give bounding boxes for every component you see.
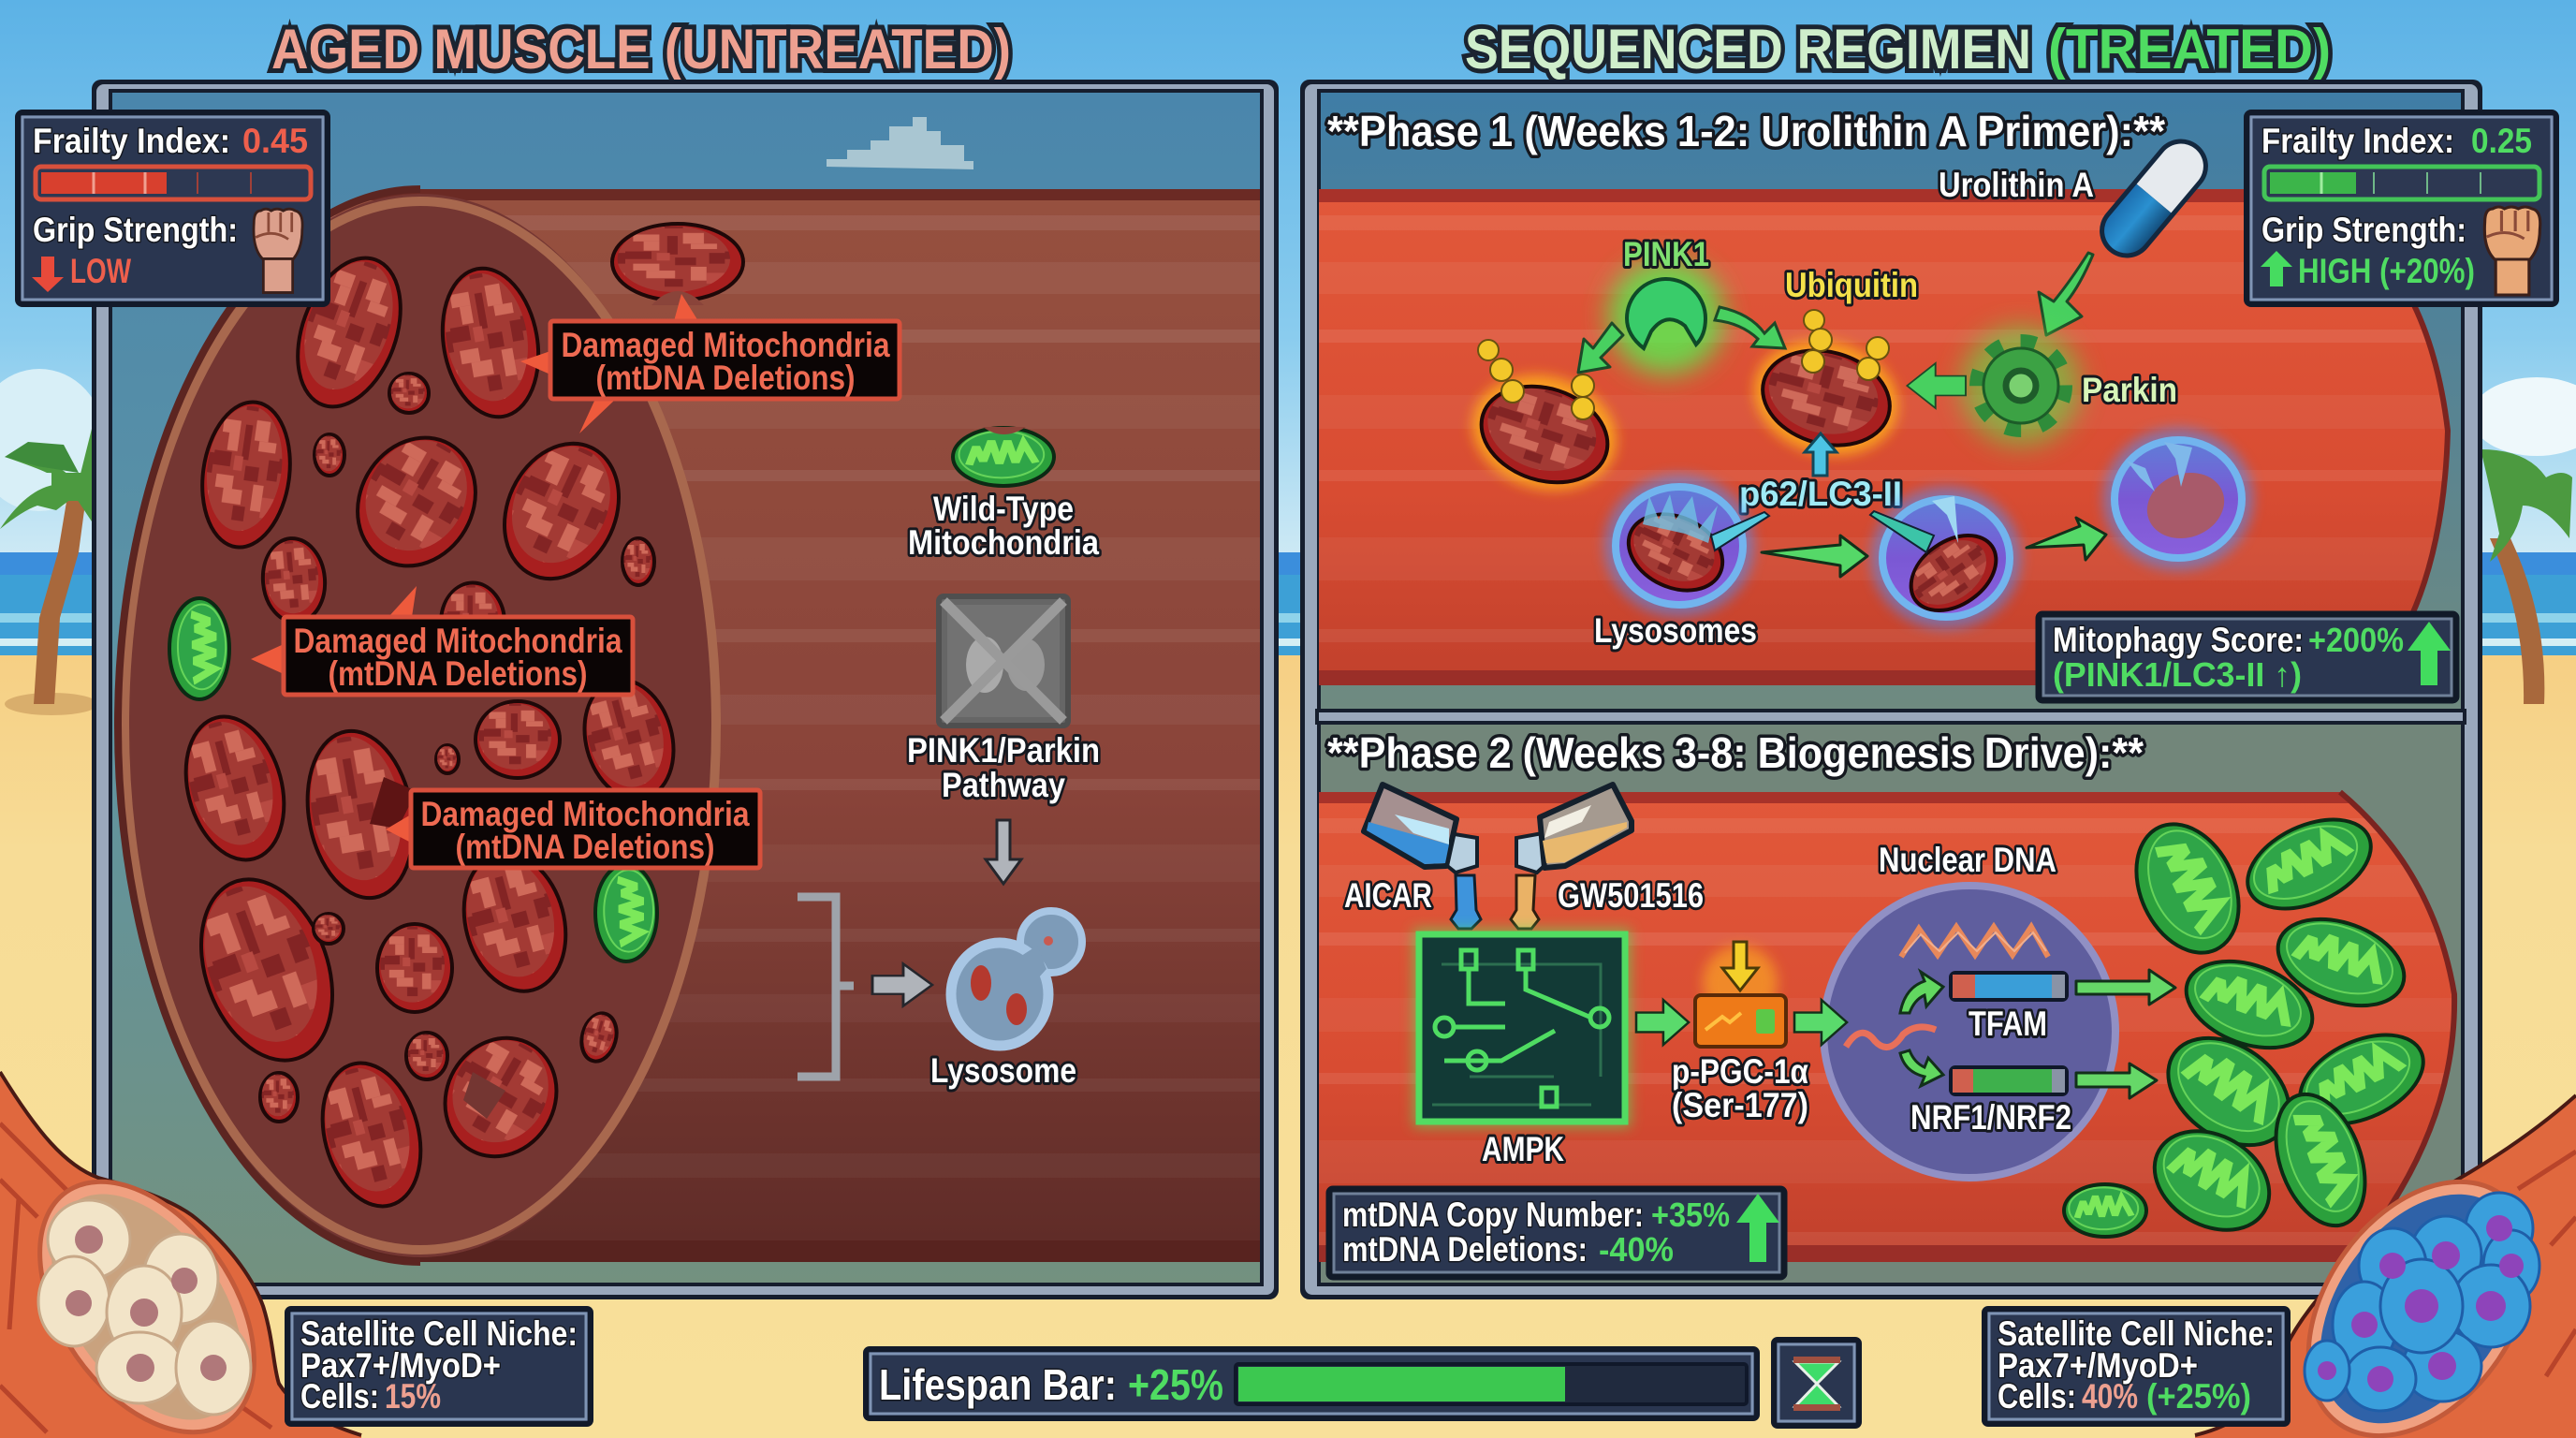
muscle fibre with cross section bbox=[114, 185, 1260, 1266]
callout: damaged mitochondria middle: (mtDNA Deletions) bbox=[328, 654, 588, 693]
icon: right palm tree bbox=[2481, 449, 2572, 704]
healthy mitochondria swarm bbox=[2064, 801, 2437, 1250]
stat box: frailty and grip untreated: Grip Strength: bbox=[33, 211, 238, 249]
arrow: pink1 to center mitochondrion bbox=[1715, 307, 1785, 348]
label: parkin: Parkin bbox=[2082, 371, 2177, 409]
icon: p-pgc-1a chip bbox=[1695, 942, 1786, 1047]
stat box: satellite cell niche untreated: Pax7+/MyoD+ bbox=[300, 1346, 501, 1385]
stat box: frailty and grip untreated: Frailty Index: bbox=[33, 122, 230, 160]
icon: lysosome 1 bbox=[1604, 475, 1769, 617]
label: pink1: PINK1 bbox=[1623, 235, 1709, 273]
stat box: frailty and grip treated: 0.25 bbox=[2471, 122, 2532, 160]
dna helix bbox=[1901, 927, 2048, 957]
icon: tagged mitochondrion center bbox=[1741, 310, 1911, 471]
high arrow bbox=[2261, 251, 2292, 286]
stat box: mtdna: -40% bbox=[1599, 1230, 1674, 1269]
stat box: mtdna bbox=[1329, 1189, 1784, 1277]
stat box: frailty and grip treated: Frailty Index: bbox=[2261, 122, 2454, 160]
label: pink1/parkin pathway bbox=[907, 731, 1100, 804]
lifespan bar: Lifespan Bar: bbox=[879, 1360, 1117, 1409]
label: urolithin a: Urolithin A bbox=[1939, 166, 2094, 204]
satellite cells quiescent bbox=[38, 1200, 251, 1415]
label: lysosomes: Lysosomes bbox=[1594, 611, 1757, 650]
stat box: frailty and grip untreated bbox=[18, 112, 328, 304]
arrow: parkin to mitochondrion bbox=[1907, 363, 1966, 408]
damaged mitochondria cluster bbox=[171, 224, 743, 1217]
label: nrf1/nrf2: NRF1/NRF2 bbox=[1910, 1098, 2071, 1137]
title: sequenced regimen: (TREATED) bbox=[2048, 18, 2331, 81]
arrow: ampk to p-pgc bbox=[1636, 1000, 1689, 1045]
satellite cells activated bbox=[2305, 1193, 2539, 1411]
stat box: frailty and grip untreated: 0.45 bbox=[242, 122, 308, 160]
label: pink1/parkin pathway: PINK1/Parkin bbox=[907, 731, 1100, 770]
icon: strong fist bbox=[2484, 207, 2540, 295]
divider between phases bbox=[1317, 711, 2465, 723]
icon: gw501516 bottle bbox=[1511, 785, 1632, 929]
icon: left palm tree bbox=[0, 429, 94, 704]
label: ubiquitin: Ubiquitin bbox=[1785, 266, 1918, 304]
label: ampk: AMPK bbox=[1482, 1130, 1564, 1168]
arrow: p-pgc to nucleus bbox=[1794, 1000, 1847, 1045]
arrow: tfam output bbox=[2076, 970, 2175, 1005]
callout: damaged mitochondria lower: (mtDNA Deletions) bbox=[455, 828, 715, 866]
callout: damaged mitochondria lower: Damaged Mitochondria bbox=[421, 795, 750, 833]
bar track bbox=[1236, 1364, 1747, 1404]
stat box: satellite cell niche treated bbox=[1984, 1309, 2288, 1424]
callout: damaged mitochondria middle bbox=[251, 586, 633, 695]
label: lysosome: Lysosome bbox=[930, 1051, 1076, 1090]
label: p-pgc-1a bbox=[1672, 1052, 1808, 1124]
bracket bbox=[798, 897, 854, 1077]
nrf bar bbox=[1951, 1067, 2067, 1094]
arrow: to lysosome bbox=[872, 964, 932, 1005]
label: wild-type mitochondria bbox=[908, 490, 1099, 562]
icon: hourglass bbox=[1774, 1340, 1859, 1426]
callout: damaged mitochondria lower bbox=[386, 790, 760, 868]
stat box: mitophagy score bbox=[2039, 614, 2456, 700]
lifespan bar bbox=[866, 1349, 1757, 1418]
icon: nucleus bbox=[1823, 886, 2115, 1178]
sub-panel: phase 1 bbox=[1319, 93, 2461, 709]
callout: damaged mitochondria top bbox=[520, 294, 900, 433]
icon: weak fist bbox=[254, 209, 302, 292]
icon: ampk circuit board bbox=[1413, 929, 1631, 1127]
frailty bar bbox=[36, 167, 311, 199]
stat box: mtdna: mtDNA Deletions: bbox=[1342, 1230, 1588, 1269]
tfam bar bbox=[1951, 973, 2067, 1000]
stat box: mitophagy score: +200% bbox=[2308, 621, 2404, 659]
icon: lysosome 2 bbox=[1870, 487, 2021, 629]
stat box: frailty and grip treated: HIGH (+20%) bbox=[2298, 252, 2475, 290]
icon: aicar bottle bbox=[1364, 785, 1481, 929]
stat box: satellite cell niche untreated: Satellite Cell Niche: bbox=[300, 1314, 578, 1353]
stat box: frailty and grip untreated: LOW bbox=[70, 252, 131, 290]
label: p62/lc3-ii: p62/LC3-II bbox=[1739, 475, 1902, 513]
arrow: nrf output bbox=[2076, 1064, 2157, 1098]
heading: phase 2: **Phase 2 (Weeks 3-8: Biogenesis Drive):** bbox=[1327, 728, 2144, 777]
icon: tagged mitochondrion left bbox=[1459, 340, 1630, 506]
stat box: mtdna: mtDNA Copy Number: bbox=[1342, 1196, 1644, 1234]
icon: wild-type mitochondrion bbox=[953, 427, 1054, 486]
arrow: p62 up bbox=[1805, 433, 1837, 476]
icon: lysosome 3 bbox=[2103, 428, 2253, 570]
mrna wiggle bbox=[1846, 1027, 1936, 1048]
arrow: lysosome 2 to 3 bbox=[2027, 518, 2106, 560]
label: wild-type mitochondria: Wild-Type bbox=[933, 490, 1074, 528]
stat box: mtdna: +35% bbox=[1651, 1196, 1730, 1234]
sub-panel: phase 2 bbox=[1319, 725, 2461, 1283]
stat box: satellite cell niche treated: (+25%) bbox=[2146, 1377, 2251, 1416]
stat box: mitophagy score: (PINK1/LC3-II ↑) bbox=[2053, 655, 2302, 694]
icon: blocked pathway grey box bbox=[939, 596, 1068, 726]
stat box: mitophagy score: Mitophagy Score: bbox=[2053, 621, 2304, 659]
stat box: satellite cell niche treated: Pax7+/MyoD+ bbox=[1998, 1346, 2198, 1385]
icon: urolithin a capsule bbox=[2088, 128, 2219, 269]
corner: muscle with satellite niche right bbox=[2195, 1095, 2576, 1438]
frailty bar bbox=[2264, 167, 2539, 199]
stat box: frailty and grip treated bbox=[2247, 112, 2556, 304]
label: wild-type mitochondria: Mitochondria bbox=[908, 523, 1099, 562]
stat box: satellite cell niche treated: Satellite Cell Niche: bbox=[1998, 1314, 2275, 1353]
label: nuclear dna: Nuclear DNA bbox=[1879, 841, 2056, 879]
callout: damaged mitochondria top: Damaged Mitochondria bbox=[562, 326, 890, 364]
label: p-pgc-1a: p-PGC-1α bbox=[1672, 1052, 1808, 1091]
stat box: satellite cell niche treated: Cells: bbox=[1998, 1377, 2076, 1416]
low arrow bbox=[32, 257, 64, 292]
cloud in panel bbox=[827, 117, 973, 169]
label: tfam: TFAM bbox=[1969, 1005, 2047, 1043]
stat box: satellite cell niche untreated: 15% bbox=[385, 1377, 441, 1416]
callout: damaged mitochondria top: (mtDNA Deletions) bbox=[595, 359, 856, 397]
healthy mitochondria in cross section bbox=[169, 598, 657, 961]
title: sequenced regimen: SEQUENCED REGIMEN bbox=[1465, 18, 2031, 81]
heading: phase 1: **Phase 1 (Weeks 1-2: Urolithin A Primer):** bbox=[1327, 107, 2165, 155]
arrow: urolithin to parkin bbox=[2039, 253, 2093, 335]
arrow: lysosome 1 to 2 bbox=[1762, 536, 1867, 577]
label: pink1/parkin pathway: Pathway bbox=[942, 766, 1065, 804]
arrow: pathway down bbox=[986, 820, 1021, 884]
stat box: frailty and grip treated: Grip Strength: bbox=[2261, 211, 2466, 249]
label: aicar: AICAR bbox=[1344, 876, 1432, 915]
icon: parkin gear bbox=[1961, 326, 2081, 446]
corner: muscle with satellite niche left bbox=[0, 1072, 361, 1438]
label: gw501516: GW501516 bbox=[1558, 876, 1704, 915]
callout: damaged mitochondria middle: Damaged Mitochondria bbox=[294, 622, 622, 660]
panel: aged muscle untreated bbox=[92, 80, 1279, 1299]
label: p-pgc-1a: (Ser-177) bbox=[1672, 1086, 1808, 1124]
stat box: satellite cell niche treated: 40% bbox=[2082, 1377, 2138, 1416]
bar fill bbox=[1238, 1367, 1565, 1401]
icon: pink1 bbox=[1608, 258, 1724, 374]
small green arrows bbox=[1900, 972, 1943, 1086]
icon: lysosome untreated bbox=[951, 911, 1082, 1046]
arrow: pink1 to left mitochondrion bbox=[1578, 323, 1623, 373]
title: aged muscle: AGED MUSCLE (UNTREATED) bbox=[271, 18, 1011, 81]
lifespan bar: +25% bbox=[1128, 1360, 1223, 1409]
stat box: satellite cell niche untreated: Cells: bbox=[300, 1377, 379, 1416]
stat box: satellite cell niche untreated bbox=[287, 1309, 591, 1424]
